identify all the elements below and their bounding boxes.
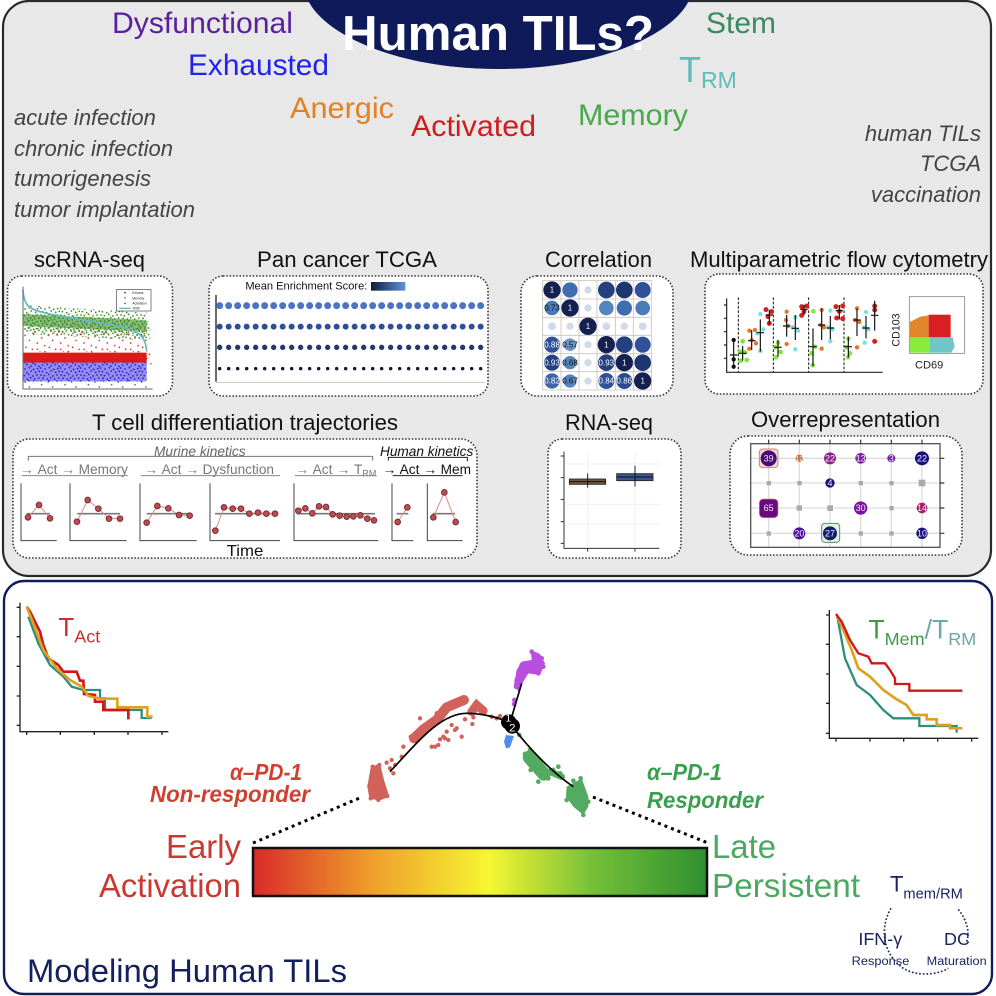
section headings: T cell differentiation trajectories [92, 410, 398, 435]
section headings: Multiparametric flow cytometry [690, 247, 989, 272]
label: T mem / T RM: /T [925, 614, 948, 644]
section headings: scRNA-seq [34, 247, 145, 272]
kinetics labels: T [354, 462, 363, 477]
chart: pan cancer dot plot: Mean Enrichment Score: [245, 280, 367, 292]
kinetics labels: Act [400, 462, 420, 477]
label: late persistent [712, 828, 860, 904]
dotted cards [8, 274, 983, 558]
chart: correlation matrix: 0.67 [562, 377, 578, 386]
state labels: Activated [411, 110, 536, 143]
label: early activation: Early [166, 828, 241, 865]
section headings: Pan cancer TCGA [257, 247, 437, 272]
label: T act: Act [74, 626, 100, 646]
chart: correlation matrix [543, 281, 651, 390]
branch node: 1 [506, 714, 512, 725]
chart: overrepresentation bubble grid: 12 [795, 456, 803, 463]
label: late persistent: Persistent [712, 867, 860, 904]
context list: right: human TILs [865, 121, 981, 146]
context list: right: TCGA [920, 151, 981, 176]
branch node [501, 714, 520, 734]
chart: correlation matrix: 1 [568, 304, 573, 313]
kinetics labels: → [185, 462, 199, 477]
survival plot: T mem/RM [826, 610, 978, 742]
section headings: RNA-seq [565, 410, 653, 435]
label: responder: Responder [647, 787, 764, 813]
chart: correlation matrix: 0.82 [544, 377, 560, 386]
chart: RNA-seq box plot [561, 452, 659, 552]
cluster: responder [519, 735, 588, 815]
chart: T cell differentiation trajectories [20, 444, 473, 560]
diagram: T mem/RM cycle: T [890, 872, 903, 897]
state labels: Exhausted [188, 49, 329, 82]
chart: correlation matrix: 0.73 [544, 304, 560, 313]
axis label: time: Time [227, 543, 263, 560]
chart: correlation matrix: 0.86 [617, 377, 633, 386]
chart: overrepresentation bubble grid: 10 [917, 528, 927, 538]
diagram: T mem/RM cycle: mem/RM [903, 886, 963, 902]
chart: scRNA-seq scatter: Exhaus [132, 291, 144, 295]
gradient bar [253, 848, 707, 896]
chart: overrepresentation bubble grid: 30 [856, 503, 866, 513]
label: non-responder: Non-responder [150, 781, 311, 807]
kinetics labels: → [20, 462, 34, 477]
chart: correlation matrix: 1 [640, 377, 645, 386]
survival plot: T activated [17, 603, 168, 735]
label: late persistent: Late [712, 828, 776, 865]
flow plot [890, 297, 965, 371]
trajectory plot [367, 650, 588, 815]
context list: left: tumor implantation [14, 197, 195, 222]
chart: overrepresentation bubble grid: 4 [827, 478, 832, 488]
chart: overrepresentation bubble grid: 39 [764, 453, 774, 463]
kinetics labels: Act [162, 462, 182, 477]
title banner: Human TILs? [342, 7, 654, 61]
kinetics labels: Act [313, 462, 333, 477]
kinetics labels: Dysfunction [203, 462, 274, 477]
diagram: T mem/RM cycle: Maturation [927, 954, 987, 968]
chart: correlation matrix: 0.84 [599, 377, 615, 386]
section headings: Correlation [545, 247, 652, 272]
state labels: Stem [706, 7, 776, 40]
kinetics labels: Mem [441, 462, 471, 477]
context list: left: acute infection [14, 105, 156, 130]
chart: overrepresentation bubble grid [751, 440, 944, 547]
context list: right: vaccination [871, 182, 981, 207]
chart: overrepresentation bubble grid: 65 [764, 503, 774, 513]
diagram: T mem/RM cycle: IFN-γ [858, 929, 902, 949]
chart: scRNA-seq scatter [23, 287, 153, 389]
label: T act: T [58, 612, 74, 642]
chart: flow cytometry summary [724, 297, 965, 372]
label: T mem / T RM: RM [948, 629, 976, 649]
chart: pan cancer dot plot [216, 280, 485, 382]
state labels: Memory [578, 99, 688, 132]
diagram: T mem/RM cycle: Response [852, 954, 910, 968]
kinetics labels: RM [362, 468, 376, 478]
chart: correlation matrix: 0.93 [599, 358, 615, 367]
chart: correlation matrix: 1 [586, 322, 591, 331]
context list: right [865, 121, 981, 207]
state labels: RM [701, 67, 737, 93]
kinetics labels: Memory [79, 462, 128, 477]
title banner [307, 0, 690, 69]
chart: overrepresentation bubble grid: 22 [825, 453, 835, 463]
diagram: T mem/RM cycle: DC [944, 929, 970, 949]
principal curve [390, 683, 573, 787]
state labels: T [679, 49, 701, 90]
chart: overrepresentation bubble grid: 20 [794, 528, 804, 538]
chart: correlation matrix: 1 [550, 286, 555, 295]
label: T mem / T RM: T [868, 614, 885, 644]
kinetics labels: → [61, 462, 75, 477]
chart: correlation matrix: 1 [604, 340, 609, 349]
label: early activation: Activation [99, 867, 241, 904]
dotted connectors [253, 797, 708, 843]
cluster: blue [504, 735, 514, 748]
label: T mem / T RM: Mem [885, 629, 925, 649]
mini chart axes [21, 483, 463, 541]
diagram: T mem/RM cycle [852, 872, 987, 974]
kinetics labels: Human kinetics [380, 444, 473, 459]
chart: overrepresentation bubble grid: 14 [917, 503, 927, 513]
chart: overrepresentation bubble grid: 22 [917, 453, 927, 463]
chart: correlation matrix: 0.68 [562, 358, 578, 367]
section headings: Overrepresentation [751, 407, 940, 432]
chart: correlation matrix: 0.93 [544, 358, 560, 367]
kinetics labels: → [144, 462, 158, 477]
chart: correlation matrix: 1 [622, 358, 627, 367]
panel: human TILs evidence [3, 0, 991, 576]
chart: overrepresentation bubble grid: 3 [889, 453, 894, 463]
chart: scRNA-seq scatter: Activation [132, 302, 147, 306]
label: non-responder [150, 759, 311, 807]
chart: overrepresentation bubble grid: 13 [856, 453, 866, 463]
panel heading: Modeling Human TILs [27, 952, 347, 989]
state labels: Anergic [290, 92, 394, 125]
label: responder [647, 759, 764, 813]
branch node: 2 [509, 722, 515, 734]
cluster: activated [367, 700, 500, 801]
panel: modeling human TILs [4, 581, 992, 994]
cluster: magenta branch [514, 650, 545, 704]
flow plot: CD69 [915, 359, 943, 371]
label: responder: α–PD-1 [647, 759, 722, 785]
flow plot: CD103 [890, 313, 902, 347]
section headings [34, 247, 989, 435]
kinetics labels: → [337, 462, 350, 477]
kinetics labels: → [423, 462, 437, 477]
chart: correlation matrix: 0.88 [544, 340, 560, 349]
context list: left [14, 105, 195, 222]
label: early activation [99, 828, 241, 904]
kinetics labels: Act [38, 462, 58, 477]
chart: overrepresentation bubble grid: 27 [825, 528, 835, 538]
chart: scRNA-seq scatter: Memory [132, 296, 145, 300]
kinetics labels: → [295, 462, 309, 477]
state labels: Dysfunctional [112, 7, 293, 40]
context list: left: tumorigenesis [14, 166, 151, 191]
chart: scRNA-seq scatter: TRM [132, 307, 140, 311]
kinetics labels [20, 444, 473, 478]
kinetics labels: Murine kinetics [154, 444, 246, 459]
state labels [112, 7, 776, 143]
kinetics labels: → [383, 462, 396, 477]
chart: correlation matrix: 0.57 [562, 340, 578, 349]
context list: left: chronic infection [14, 136, 173, 161]
label: non-responder: α–PD-1 [230, 759, 302, 785]
